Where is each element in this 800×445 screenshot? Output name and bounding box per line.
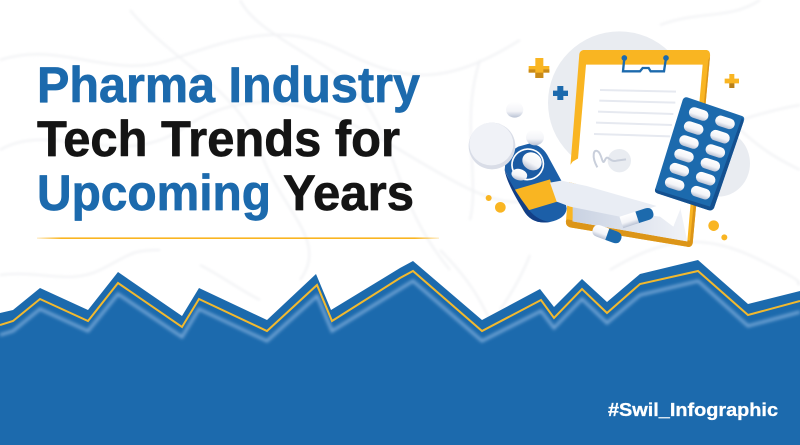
footer band — [0, 260, 800, 445]
title line 1: Pharma Industry — [37, 57, 420, 113]
pill bottle — [505, 143, 567, 222]
clipboard clip — [623, 56, 668, 71]
paper text lines — [594, 90, 676, 136]
blister pack — [655, 97, 744, 210]
title line 3: Years — [283, 165, 414, 221]
clipboard paper — [573, 65, 703, 241]
title line 3 — [37, 165, 414, 221]
title underline — [37, 237, 439, 239]
orange dots — [486, 195, 727, 240]
footer inner glow — [0, 281, 800, 341]
icon: plus signs — [529, 58, 739, 100]
title line 3: Upcoming — [37, 165, 271, 221]
white tablets — [506, 102, 544, 145]
blue zigzag footer — [0, 260, 800, 445]
capsule lower — [591, 223, 623, 245]
signature and stamp — [594, 149, 631, 172]
clipboard board — [566, 50, 710, 247]
footer yellow line — [0, 271, 800, 331]
paper curl — [560, 130, 690, 227]
hashtag: #Swil_Infographic — [608, 400, 778, 420]
title — [37, 57, 420, 221]
title line 2: Tech Trends for — [37, 111, 400, 167]
backdrop blobs — [548, 31, 750, 197]
curled paper sheet — [550, 181, 657, 217]
background texture — [0, 0, 800, 320]
illustration: clipboard with medicine — [469, 31, 750, 247]
capsule upper — [620, 206, 655, 228]
bottle cap — [469, 123, 515, 169]
